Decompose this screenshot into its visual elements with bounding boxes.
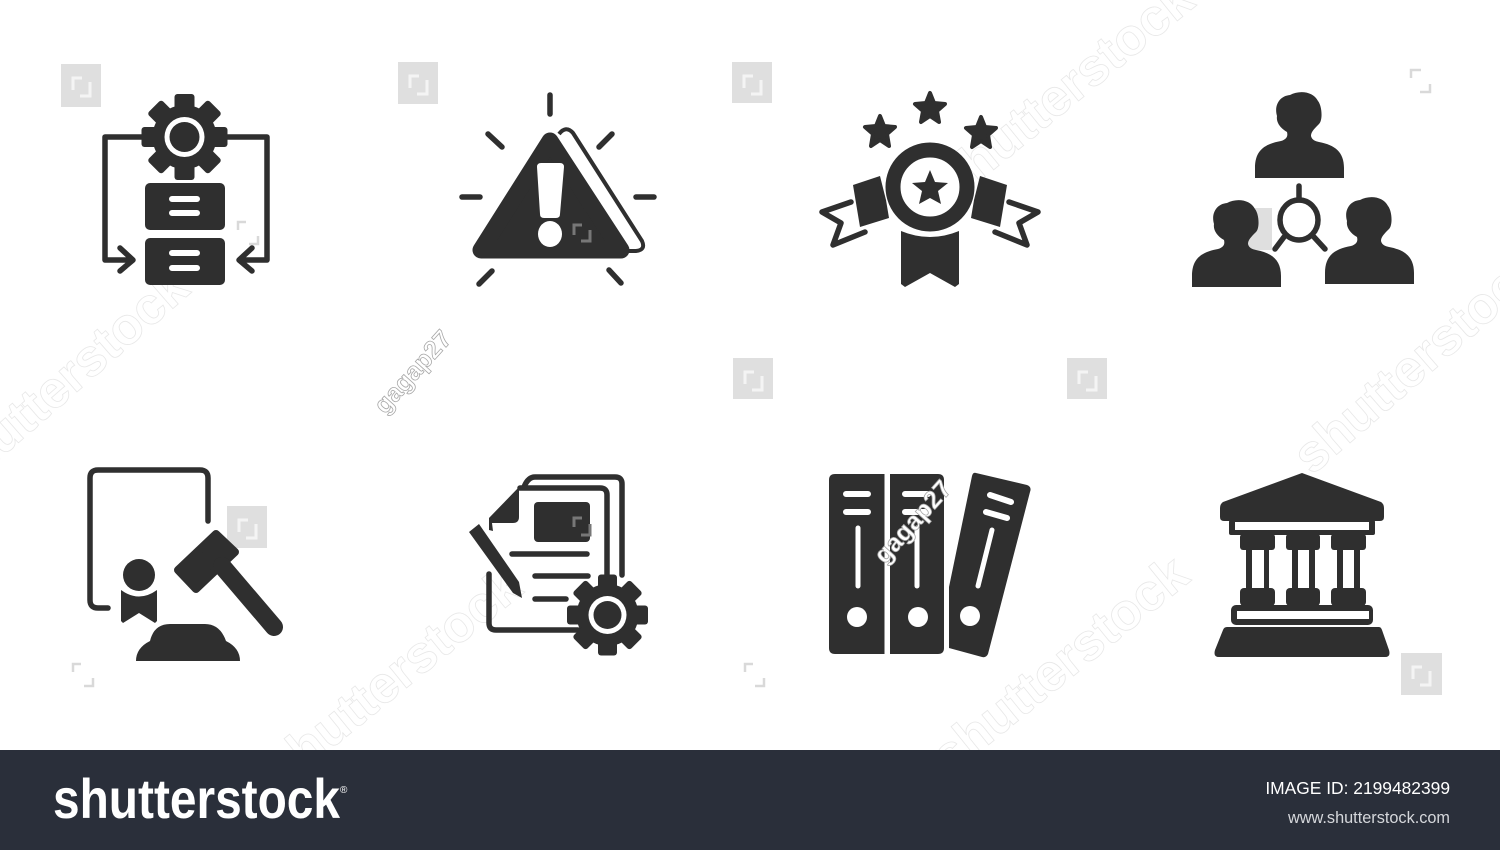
- gear: [142, 94, 228, 180]
- picture block: [534, 502, 590, 542]
- logo: ®: [340, 785, 348, 796]
- three stars: [865, 93, 996, 147]
- watermark mark: [574, 225, 590, 241]
- icon: document with gear: [469, 477, 648, 656]
- website: www.shutterstock.com: [1287, 809, 1450, 827]
- connector node: [1275, 186, 1325, 249]
- icon: certificate and gavel: [90, 470, 274, 661]
- medal: [893, 150, 967, 224]
- watermark: diagonal outlined text: shutterstock: [254, 556, 533, 798]
- side ribbons: [853, 176, 889, 227]
- back sheet: [524, 477, 622, 575]
- roof: [1220, 473, 1384, 521]
- watermark: author name: [369, 325, 957, 569]
- certificate outline: [90, 470, 208, 608]
- columns: [1240, 534, 1366, 606]
- icon: process flow with gear: [105, 94, 267, 285]
- folded page edge: [559, 129, 643, 251]
- plinth: [1231, 605, 1373, 625]
- icon: classical building: [1214, 473, 1390, 657]
- pencil: [469, 524, 522, 598]
- icon: award medal with stars: [822, 93, 1038, 287]
- watermark: author name: gagap27: [369, 325, 457, 419]
- triangle: [481, 141, 621, 250]
- watermark mark: [574, 518, 590, 535]
- server box upper: [145, 183, 225, 230]
- gear: [567, 574, 648, 656]
- binder left: [829, 474, 884, 654]
- icon: team network: [1192, 92, 1414, 287]
- binder tilted: [949, 473, 1031, 657]
- watermark: author name: gagap27: [869, 475, 957, 569]
- binder middle: [890, 474, 944, 654]
- text lines: [512, 554, 588, 599]
- folded corner: [489, 487, 519, 531]
- lower ribbon: [901, 231, 959, 287]
- icon: binders: [829, 473, 1031, 657]
- flow arrows: [105, 137, 267, 271]
- base: [1214, 627, 1390, 657]
- person top: [1255, 92, 1344, 178]
- exclamation mark: [537, 163, 564, 247]
- entablature: [1229, 520, 1375, 535]
- gavel head: [178, 534, 235, 589]
- rays: [462, 95, 654, 284]
- gavel base: [136, 624, 240, 661]
- icon: warning triangle: [462, 95, 654, 284]
- server box lower: [145, 238, 225, 285]
- front sheet: [489, 488, 607, 630]
- image id: IMAGE ID: 2199482399: [1265, 778, 1450, 798]
- person right: [1325, 197, 1414, 284]
- footer bar: [0, 750, 1500, 850]
- gavel handle: [222, 566, 274, 627]
- person left: [1192, 200, 1281, 287]
- watermark: diagonal outlined text: shutterstock: [921, 544, 1200, 786]
- logo: shutterstock: [53, 767, 341, 830]
- seal: [121, 559, 157, 623]
- watermark: grey squares: [61, 62, 1442, 695]
- ribbon tails: [822, 202, 1038, 245]
